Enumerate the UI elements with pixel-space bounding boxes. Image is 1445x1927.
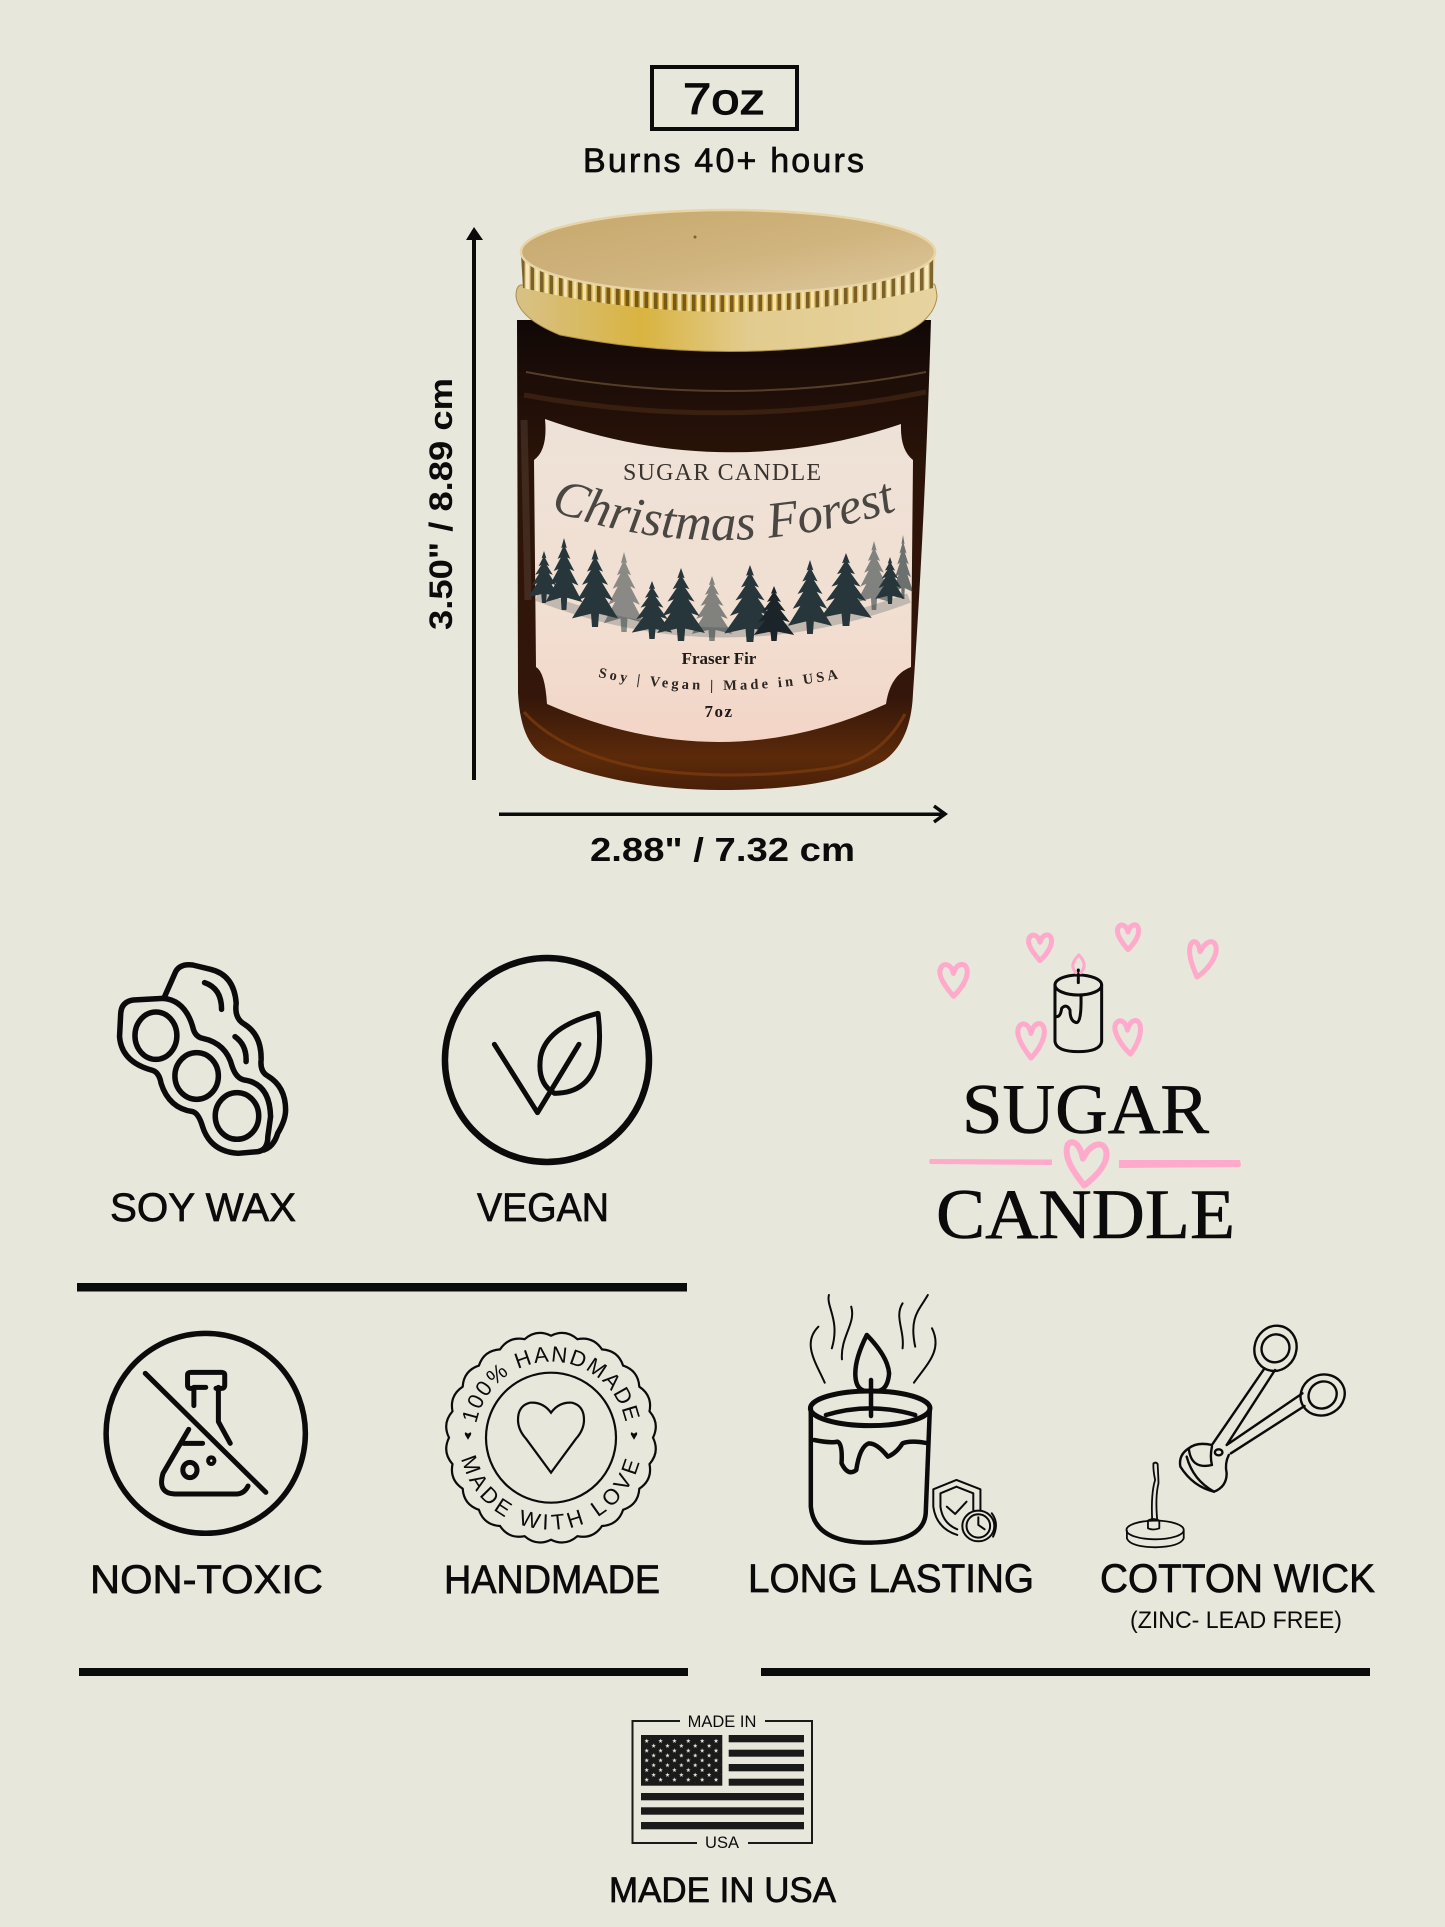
made in USA label: MADE IN USA: [609, 1871, 837, 1910]
badge: 100% handmade: 100% HANDMADE: [463, 1346, 640, 1422]
jar collar: [516, 284, 937, 352]
label fragrance: Fraser Fir: [682, 649, 757, 668]
divider lower right: [761, 1668, 1370, 1676]
lid top: [521, 210, 935, 294]
flag canton: [641, 1735, 722, 1786]
icon: non-toxic: [106, 1333, 305, 1533]
frame text top: MADE IN: [688, 1713, 756, 1731]
icon: long lasting candle: [810, 1295, 996, 1543]
handmade label: HANDMADE: [444, 1558, 660, 1602]
label scent name: Christmas Forest: [556, 484, 896, 541]
wick snuffer: [1180, 1324, 1349, 1492]
shield and clock: [933, 1480, 996, 1541]
badge: 100% handmade: MADE WITH LOVE: [461, 1455, 640, 1530]
burn time text: Burns 40+ hours: [583, 142, 864, 180]
frame text bottom: USA: [705, 1834, 739, 1852]
flag stripes: [641, 1735, 804, 1829]
logo candle: [1055, 955, 1102, 1052]
soy wax label: SOY WAX: [110, 1186, 296, 1230]
icon: cotton wick and snuffer: [1126, 1324, 1349, 1547]
jar glass body: [517, 320, 931, 790]
logo word: SUGAR: SUGAR: [962, 1071, 1210, 1149]
divider lower left: [79, 1668, 688, 1676]
cotton wick note: (ZINC- LEAD FREE): [1130, 1607, 1342, 1634]
icon: soy wax: [120, 965, 286, 1153]
forest illustration: [528, 535, 913, 642]
badge: 100% handmade: [445, 1332, 657, 1544]
logo word: CANDLE: CANDLE: [936, 1176, 1235, 1254]
size badge: 7oz: [652, 67, 797, 129]
rising heat lines: [811, 1295, 936, 1383]
non-toxic label: NON-TOXIC: [90, 1558, 323, 1602]
lid ribbed band: [521, 255, 935, 312]
candle body: [811, 1407, 930, 1543]
logo hearts: [940, 925, 1216, 1186]
long lasting label: LONG LASTING: [748, 1557, 1034, 1601]
width arrow: [499, 806, 945, 822]
brand logo: Sugar Candle: [929, 925, 1241, 1254]
height dimension label: 3.50" / 8.89 cm: [423, 378, 459, 630]
cotton wick label: COTTON WICK: [1100, 1557, 1375, 1601]
flag frame: [632, 1721, 812, 1843]
paper label: [534, 419, 913, 742]
label size: 7oz: [704, 702, 734, 721]
label attributes: Soy | Vegan | Made in USA: [598, 668, 838, 693]
width dimension label: 2.88" / 7.32 cm: [590, 831, 855, 868]
wick on base: [1126, 1463, 1184, 1547]
candle jar photo: [516, 208, 938, 790]
divider upper left: [77, 1283, 687, 1292]
label brand line: SUGAR CANDLE: [623, 460, 821, 486]
icon: made in USA flag: [632, 1713, 812, 1852]
vegan label: VEGAN: [477, 1186, 609, 1230]
icon: vegan: [445, 958, 649, 1162]
height arrow: [466, 227, 483, 780]
logo divider: [929, 1159, 1241, 1168]
size badge: 7oz: 7oz: [683, 75, 765, 124]
flame: [855, 1335, 889, 1416]
